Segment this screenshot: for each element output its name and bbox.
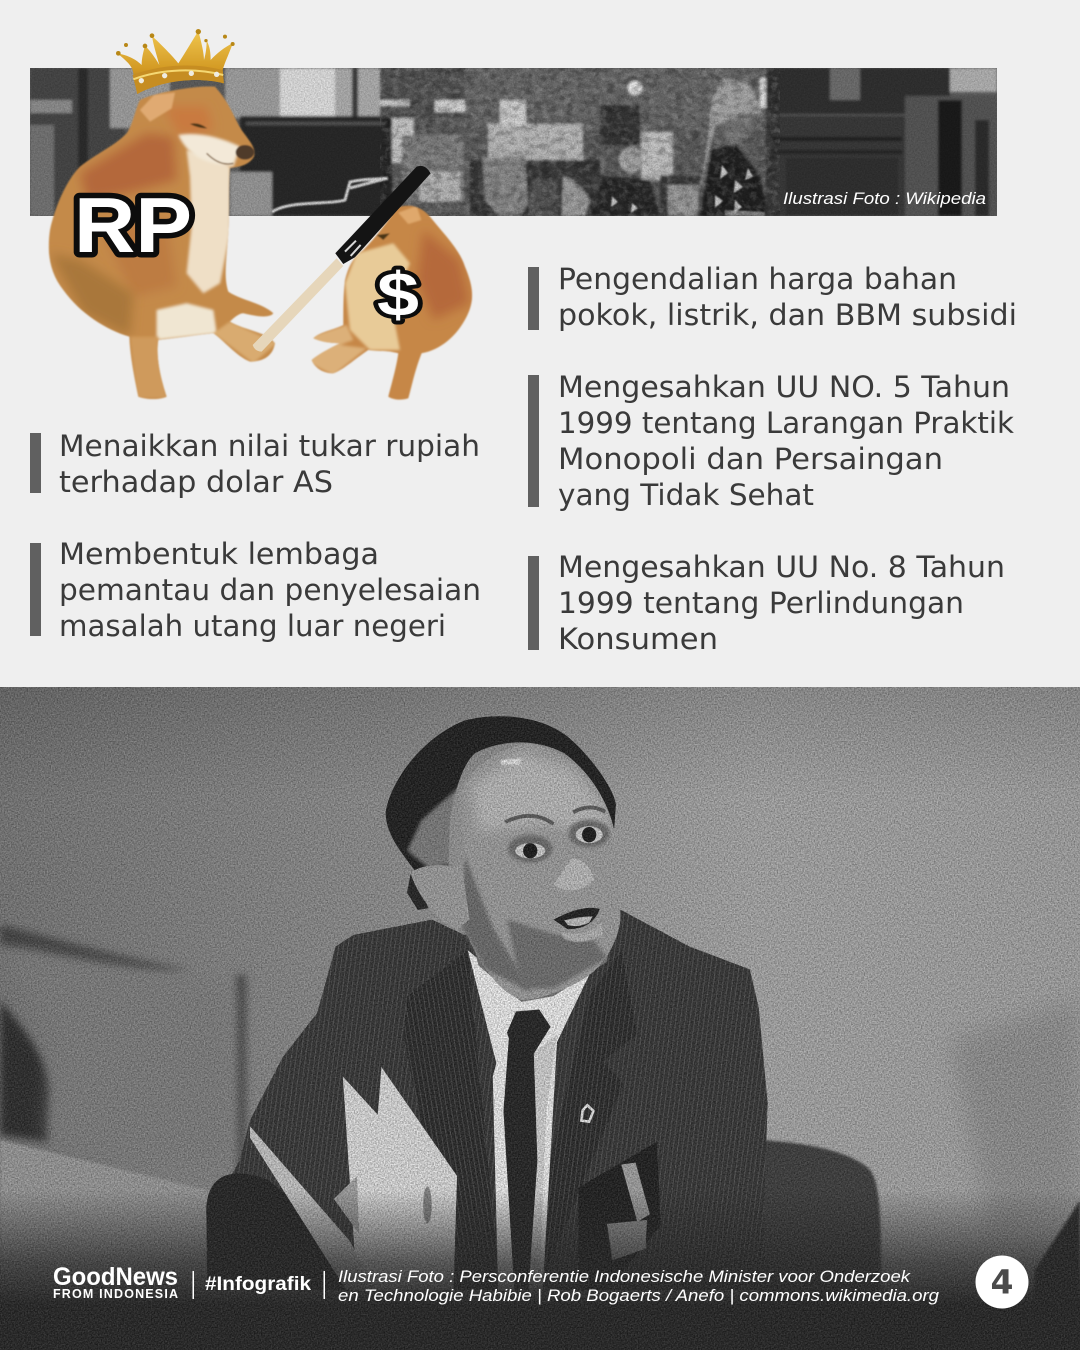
- large dog labelled RP: [43, 80, 280, 403]
- bullet: UU No. 8: Konsumen: [558, 622, 718, 656]
- photo credit: banner: Ilustrasi Foto : Wikipedia: [783, 190, 986, 208]
- hashtag: #Infografik: [205, 1274, 311, 1295]
- photo credit: Ilustrasi Foto : Persconferentie Indonesische Minister voor Onderzoek: [338, 1267, 912, 1286]
- label dollar: $: [377, 261, 419, 330]
- bullet: UU No. 5: yang Tidak Sehat: [558, 478, 814, 512]
- icon: baseball bat: [253, 166, 431, 352]
- bullet: UU No. 5: Mengesahkan UU NO. 5 Tahun: [558, 370, 1010, 404]
- bullet: UU No. 8: [528, 550, 1005, 656]
- bullet: UU No. 5: Monopoli dan Persaingan: [558, 442, 943, 476]
- bullet: debt monitoring body: [30, 537, 481, 643]
- bullet: UU No. 8: 1999 tentang Perlindungan: [558, 586, 964, 620]
- page number: 4: [991, 1262, 1013, 1302]
- footer: [53, 1256, 1028, 1308]
- man in pinstripe suit: [206, 716, 768, 1290]
- bullet: UU No. 8: Mengesahkan UU No. 8 Tahun: [558, 550, 1005, 584]
- market photo banner: [30, 68, 997, 230]
- logo: GoodNews from Indonesia: GoodNews: [53, 1263, 178, 1291]
- bullet: exchange rate: terhadap dolar AS: [59, 465, 333, 499]
- photo credit: en Technologie Habibie | Rob Bogaerts / Anefo | commons.wikimedia.org: [338, 1286, 940, 1305]
- bullet: debt monitoring body: masalah utang luar negeri: [59, 609, 446, 643]
- bullet: price control: pokok, listrik, dan BBM subsidi: [558, 298, 1017, 332]
- bullet: price control: [528, 262, 1017, 332]
- bullet: UU No. 5: [528, 370, 1014, 512]
- meme: dog RP with crown and bat, dog dollar: [43, 29, 477, 403]
- photo credit: [338, 1267, 940, 1305]
- small dog labelled dollar: [310, 200, 477, 403]
- bullet: debt monitoring body: Membentuk lembaga: [59, 537, 379, 571]
- logo: GoodNews from Indonesia: FROM INDONESIA: [53, 1287, 178, 1301]
- icon: gold crown: [116, 29, 235, 94]
- bullet: UU No. 5: 1999 tentang Larangan Praktik: [558, 406, 1014, 440]
- label RP: RP: [74, 181, 192, 269]
- bullet: exchange rate: [30, 429, 480, 499]
- portrait photo: Habibie at press conference: [0, 687, 1080, 1350]
- bullet: debt monitoring body: pemantau dan penyelesaian: [59, 573, 481, 607]
- page number: [976, 1256, 1028, 1308]
- bullet: price control: Pengendalian harga bahan: [558, 262, 957, 296]
- bullet: exchange rate: Menaikkan nilai tukar rupiah: [59, 429, 480, 463]
